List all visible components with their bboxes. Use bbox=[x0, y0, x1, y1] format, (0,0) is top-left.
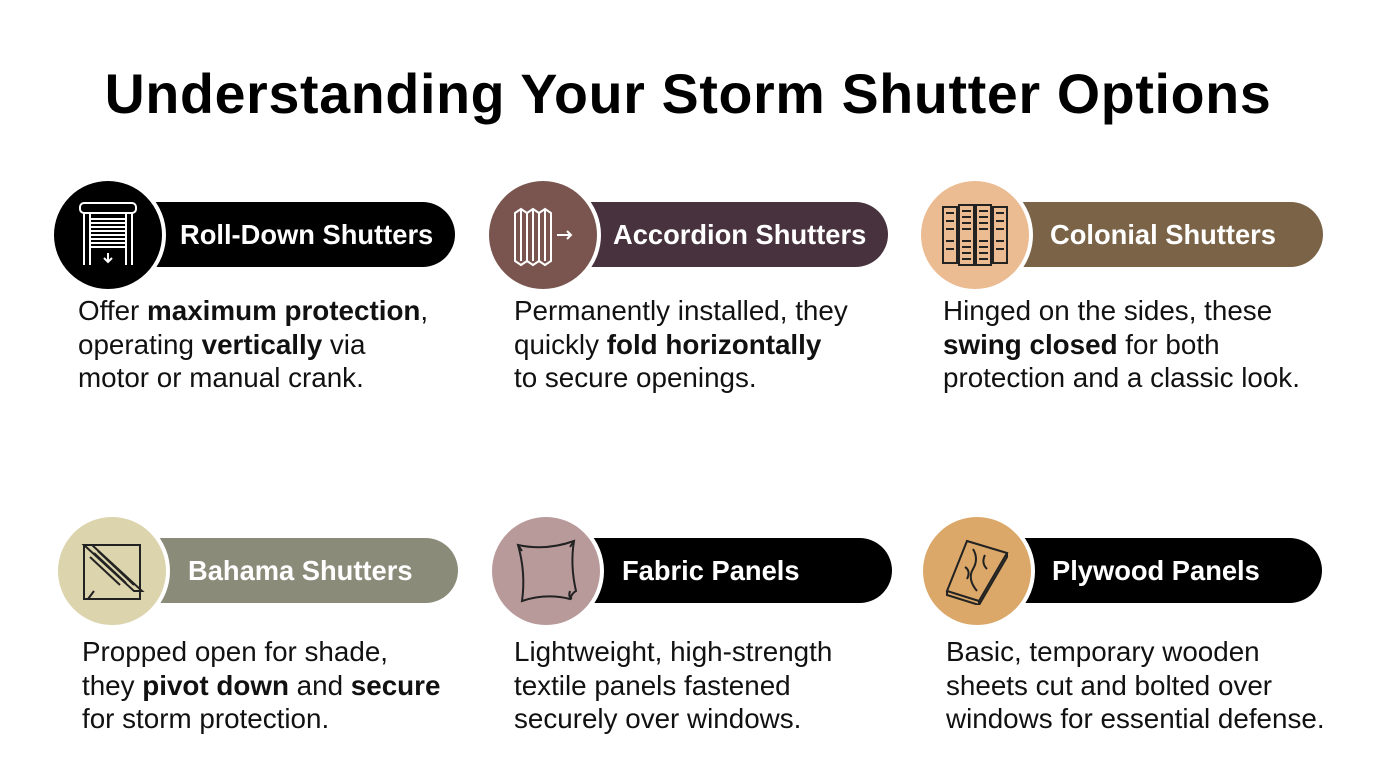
text: plywood: Basic, temporary wooden bbox=[946, 636, 1260, 667]
text: accordion bbox=[514, 295, 848, 393]
pill: roll-down bbox=[110, 202, 455, 267]
pill: accordion bbox=[545, 202, 888, 267]
text: plywood bbox=[946, 636, 1325, 734]
title: Understanding Your Storm Shutter Options bbox=[105, 63, 1271, 125]
text: accordion: quickly fold horizontally bbox=[514, 328, 821, 360]
pill: plywood: Plywood Panels bbox=[1052, 555, 1260, 586]
panel: accordion bbox=[489, 181, 888, 393]
panel: fabric bbox=[492, 517, 892, 734]
panel: roll-down bbox=[54, 181, 455, 393]
icon: accordion bbox=[485, 177, 601, 293]
panel: plywood bbox=[923, 517, 1325, 734]
icon: colonial bbox=[917, 177, 1033, 293]
text: fabric: textile panels fastened bbox=[514, 670, 791, 700]
pill: accordion: Accordion Shutters bbox=[613, 219, 866, 250]
text: roll-down: Offer maximum protection, bbox=[78, 295, 428, 326]
icon: bahama bbox=[54, 513, 170, 629]
text: fabric: securely over windows. bbox=[514, 703, 801, 734]
icon: fabric bbox=[488, 513, 604, 629]
text: colonial bbox=[943, 295, 1300, 393]
pill: fabric: Fabric Panels bbox=[622, 555, 800, 586]
text: bahama: for storm protection. bbox=[82, 703, 329, 734]
text: bahama: Propped open for shade, bbox=[82, 636, 388, 667]
pill: bahama: Bahama Shutters bbox=[188, 555, 413, 586]
pill: plywood bbox=[979, 538, 1322, 603]
icon: roll-down bbox=[50, 177, 166, 293]
text: roll-down bbox=[78, 295, 428, 393]
pill: bahama bbox=[114, 538, 458, 603]
text: colonial: Hinged on the sides, these bbox=[943, 295, 1272, 326]
text: plywood: windows for essential defense. bbox=[946, 703, 1325, 734]
text: colonial: swing closed for both bbox=[943, 328, 1220, 360]
text: colonial: protection and a classic look. bbox=[943, 362, 1300, 393]
text: accordion: Permanently installed, they bbox=[514, 295, 848, 326]
text: bahama bbox=[82, 636, 440, 734]
panel: colonial bbox=[921, 181, 1323, 393]
panel: bahama bbox=[58, 517, 458, 734]
text: fabric: Lightweight, high-strength bbox=[514, 636, 832, 667]
pill: colonial bbox=[977, 202, 1323, 267]
text: accordion: to secure openings. bbox=[514, 362, 757, 393]
text: roll-down: motor or manual crank. bbox=[78, 362, 364, 393]
pill: fabric bbox=[548, 538, 892, 603]
pill: roll-down: Roll-Down Shutters bbox=[180, 219, 433, 250]
icon: plywood bbox=[919, 513, 1035, 629]
text: roll-down: operating vertically via bbox=[78, 328, 365, 360]
pill: colonial: Colonial Shutters bbox=[1050, 219, 1276, 250]
text: bahama: they pivot down and secure bbox=[82, 670, 440, 700]
text: fabric bbox=[514, 636, 832, 734]
text: plywood: sheets cut and bolted over bbox=[946, 670, 1272, 700]
